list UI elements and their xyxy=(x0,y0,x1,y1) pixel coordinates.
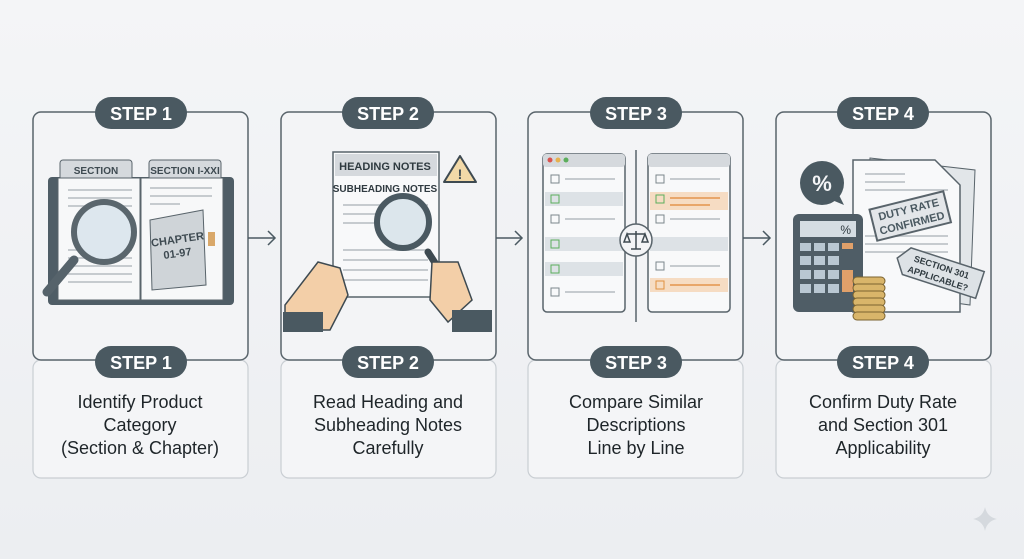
step 1 pill bottom: STEP 1 xyxy=(110,353,172,373)
step 4 text: Applicability xyxy=(835,438,931,458)
step 4 text: and Section 301 xyxy=(818,415,948,435)
icon: document with magnifier and hands: ! xyxy=(458,166,462,182)
step 2 text: Subheading Notes xyxy=(314,415,462,435)
step 1 pill bottom xyxy=(95,346,187,378)
icon: calculator, document, coins, tag: APPLICABLE? xyxy=(906,264,969,293)
step 3 text: Descriptions xyxy=(586,415,686,435)
step 2 text: Read Heading and xyxy=(313,392,463,412)
icon: book with magnifier: 01-97 xyxy=(163,246,192,262)
panel: step 2 xyxy=(281,97,496,478)
step 4 pill bottom xyxy=(837,346,929,378)
icon: book with magnifier: SECTION xyxy=(74,166,118,177)
step 2 pill bottom: STEP 2 xyxy=(357,353,419,373)
step 1 pill top xyxy=(95,97,187,129)
step 2 pill bottom xyxy=(342,346,434,378)
icon: two windows compared with scale xyxy=(543,150,730,322)
arrow 2 xyxy=(496,231,522,245)
icon: document with magnifier and hands xyxy=(283,152,492,332)
step 2 pill top xyxy=(342,97,434,129)
icon: calculator, document, coins, tag xyxy=(793,158,984,320)
step 3 pill bottom: STEP 3 xyxy=(605,353,667,373)
icon: calculator, document, coins, tag: % xyxy=(812,171,832,196)
step 1 pill top: STEP 1 xyxy=(110,104,172,124)
icon: book with magnifier: SECTION I-XXI xyxy=(150,166,220,177)
icon: document with magnifier and hands: SUBHEADING NOTES xyxy=(333,184,438,195)
icon: calculator, document, coins, tag: CONFIRMED xyxy=(878,210,946,238)
panel: step 1 xyxy=(33,97,248,478)
step 3 text: Line by Line xyxy=(587,438,685,458)
step 2 pill top: STEP 2 xyxy=(357,104,419,124)
step 1 text: Category xyxy=(103,415,177,435)
icon: calculator, document, coins, tag: DUTY RATE xyxy=(877,197,940,223)
arrow 3 xyxy=(743,231,770,245)
step 3 text: Compare Similar xyxy=(569,392,703,412)
step 3 pill bottom xyxy=(590,346,682,378)
icon: calculator, document, coins, tag: % xyxy=(840,223,851,237)
icon: book with magnifier: CHAPTER xyxy=(150,230,205,250)
icon: calculator, document, coins, tag: SECTION 301 xyxy=(913,254,970,281)
step 4 pill top xyxy=(837,97,929,129)
step 3 pill top xyxy=(590,97,682,129)
step 4 pill top: STEP 4 xyxy=(852,104,914,124)
step 4 text: Confirm Duty Rate xyxy=(809,392,957,412)
panel: step 4 xyxy=(776,97,991,478)
icon: sparkle xyxy=(973,507,997,531)
arrow 1 xyxy=(248,231,275,245)
step 3 pill top: STEP 3 xyxy=(605,104,667,124)
step 1 text: Identify Product xyxy=(77,392,203,412)
icon: document with magnifier and hands: HEADING NOTES xyxy=(339,161,431,173)
step 1 text: (Section & Chapter) xyxy=(61,438,219,458)
panel: step 3 xyxy=(528,97,743,478)
step 2 text: Carefully xyxy=(352,438,424,458)
icon: book with magnifier xyxy=(47,160,234,305)
step 4 pill bottom: STEP 4 xyxy=(852,353,914,373)
